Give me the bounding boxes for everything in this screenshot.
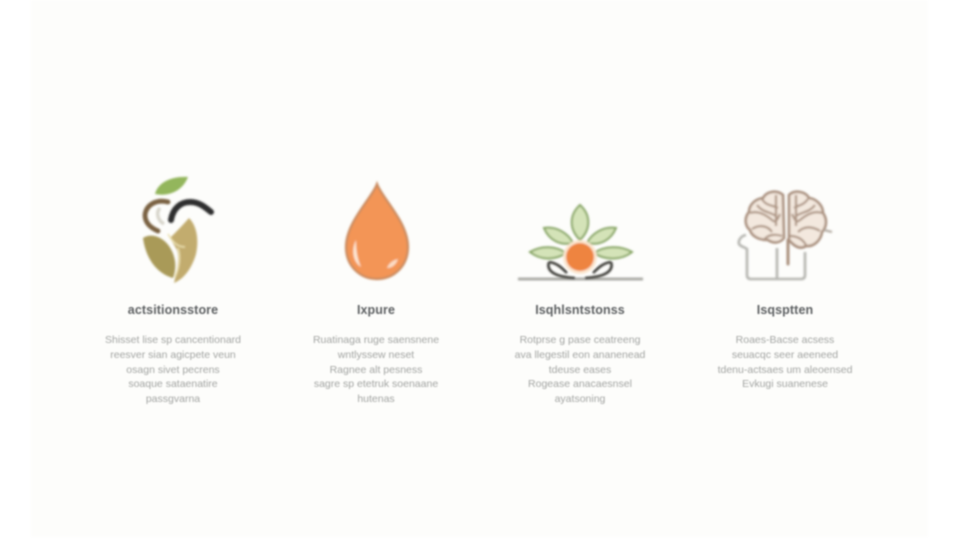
icon: heart with leaf <box>143 177 211 283</box>
brown vessel arc <box>145 201 168 231</box>
upper left leaf <box>544 228 573 244</box>
lower left heart lobe <box>143 236 175 278</box>
icon: brain over box <box>739 192 832 279</box>
description: Ruatinaga ruge saensnene <box>313 334 439 346</box>
description: ayatsoning <box>555 393 605 405</box>
hands <box>548 262 575 278</box>
column 3 text <box>514 303 646 405</box>
description: tdenu-actsaes um aleoensed <box>718 364 852 376</box>
black hook <box>171 202 211 220</box>
folds <box>750 195 782 240</box>
icon: orange drop <box>346 184 408 279</box>
column 4 text <box>717 303 853 390</box>
description <box>717 334 853 390</box>
description: Evkugi suanenese <box>742 378 828 390</box>
description: seuacqc seer aeeneed <box>732 349 838 361</box>
heading: Ixpure <box>357 303 395 317</box>
description: passgvarna <box>146 393 200 405</box>
lower right leaf <box>594 247 632 259</box>
description: Rogease anacaesnsel <box>528 378 632 390</box>
description <box>514 334 646 405</box>
lower left leaf <box>530 247 566 259</box>
icon: lotus with sun <box>518 205 643 279</box>
heading: actsitionsstore <box>128 303 218 317</box>
center leaf <box>572 205 588 240</box>
description <box>313 334 440 405</box>
heading: Isqhlsntstonss <box>535 303 625 317</box>
description <box>105 334 242 405</box>
description: wntlyssew neset <box>338 349 414 361</box>
brain stem <box>786 240 790 264</box>
description: Ragnee alt pesness <box>330 364 422 376</box>
column 2 text <box>313 303 440 405</box>
heading: Isqsptten <box>757 303 813 317</box>
description: ava llegestil eon ananenead <box>515 349 645 361</box>
description: osagn sivet pecrens <box>126 364 220 376</box>
description: sagre sp etetruk soenaane <box>314 378 438 390</box>
upper right leaf <box>587 228 616 244</box>
column 1 text <box>105 303 242 405</box>
description: reesver sian agicpete veun <box>110 349 236 361</box>
description: tdeuse eases <box>549 364 611 376</box>
description: Rotprse g pase ceatreeng <box>520 334 640 346</box>
description: hutenas <box>357 393 395 405</box>
sun <box>563 240 597 274</box>
description: Shisset lise sp cancentionard <box>105 334 241 346</box>
description: soaque sataenatire <box>128 378 218 390</box>
ground line <box>518 278 643 280</box>
right hemisphere <box>789 192 826 248</box>
description: Roaes-Bacse acsess <box>736 334 834 346</box>
leaf <box>155 177 188 195</box>
upper right heart lobe <box>170 218 197 283</box>
left hemisphere <box>746 192 784 242</box>
drop highlights <box>353 240 361 267</box>
box <box>739 235 805 279</box>
